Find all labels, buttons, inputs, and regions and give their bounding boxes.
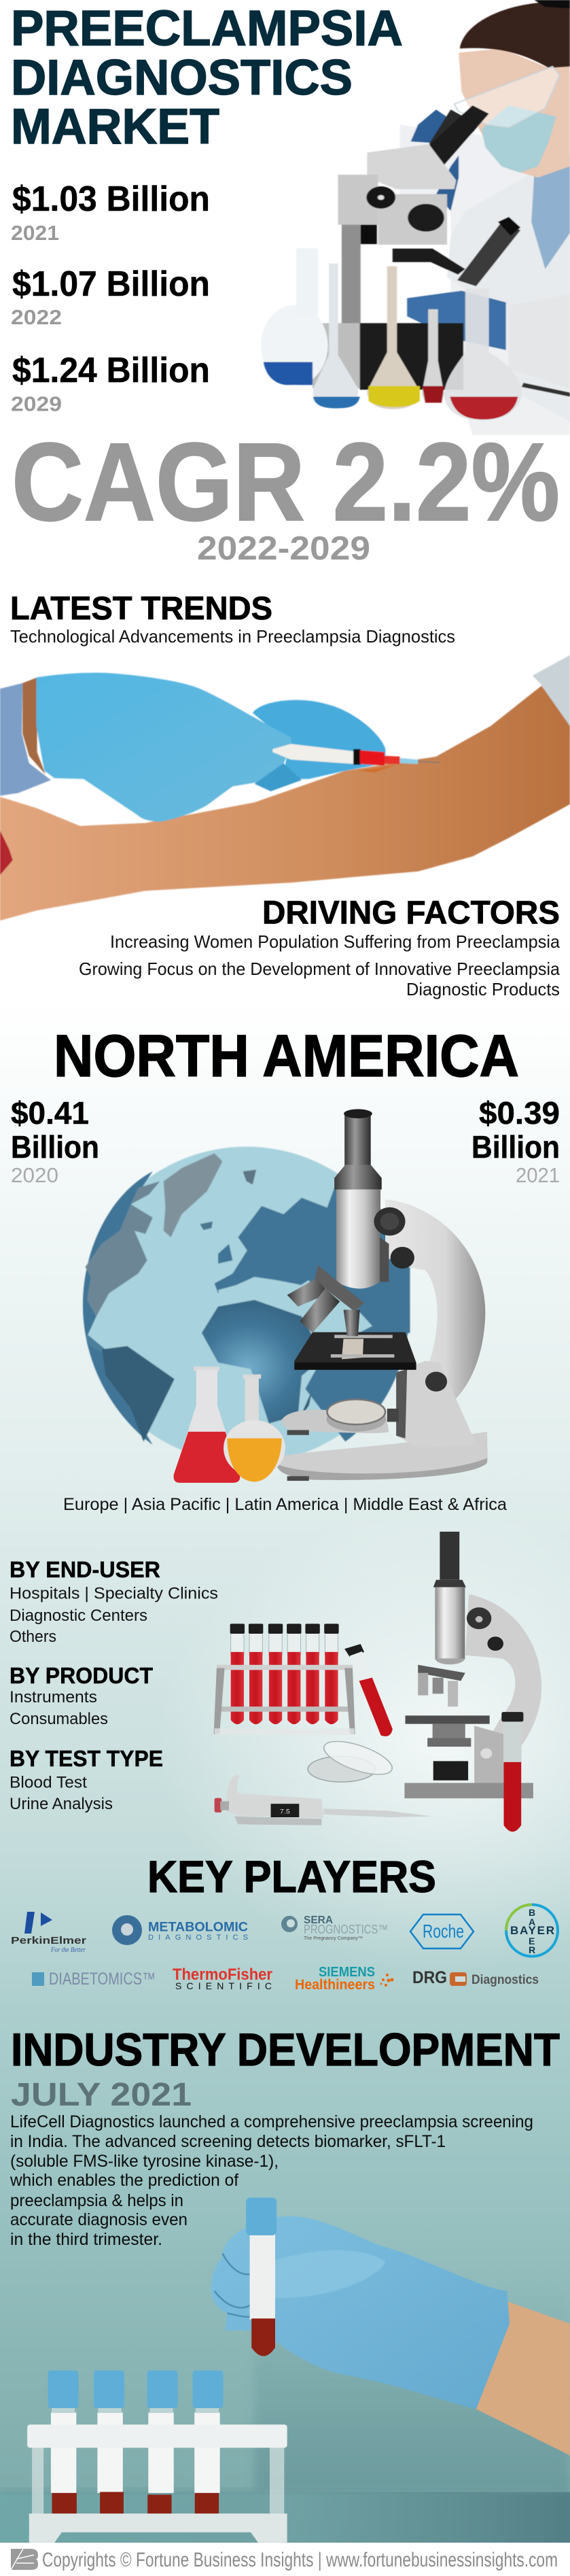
stat: 2029 value: $1.24 Billion [12,351,210,390]
title [11,1,403,154]
logo: Sera Prognostics: SERA [304,1914,333,1926]
driving factors: Growing Focus on the Development of Innovative Preeclampsia [79,959,560,979]
stat: north america 2020: Billion [11,1129,99,1165]
logo: Metabolomic Diagnostics: METABOLOMIC [148,1920,248,1935]
logo: Metabolomic Diagnostics: DIAGNOSTICS [148,1934,248,1942]
segment: by product: Instruments [10,1688,97,1706]
logo: Siemens Healthineers [295,1965,394,1993]
stat: north america 2020: $0.41 [11,1095,89,1131]
icon: test tube rack [214,1624,355,1735]
icon: tube rack [27,2371,287,2543]
logo: Bayer: B [529,1907,535,1918]
development description: preeclampsia & helps in [10,2191,183,2210]
logo: Metabolomic Diagnostics [112,1915,248,1945]
development description: in India. The advanced screening detects biomarker, sFLT-1 [10,2132,446,2151]
background glow behind lab equipment [156,1509,570,1972]
logo: DRG Diagnostics: DRG [412,1968,447,1987]
icon: orange round flask [224,1375,285,1482]
stat: 2021 value [11,179,210,245]
stat: 2022 value: $1.07 Billion [12,264,210,304]
illustration: lab equipment [214,1532,541,1832]
teal gradient background [0,999,570,2543]
segment: by test type: Urine Analysis [10,1795,113,1813]
latest trends [10,591,455,647]
segment: by end-user: BY END-USER [10,1557,160,1582]
icon: microscope [274,1109,488,1481]
stat: 2021 value: 2021 [11,221,59,245]
logo: Sera Prognostics: The Pregnancy Company™ [304,1936,363,1941]
stat: 2022 value: 2022 [11,305,62,329]
title: DIAGNOSTICS [11,50,353,105]
north america heading: NORTH AMERICA [54,1023,519,1089]
icon: pipette: 7.5 [280,1808,290,1815]
logo: Siemens Healthineers: Healthineers [295,1977,375,1993]
logo: Sera Prognostics [281,1914,388,1941]
driving factors: Increasing Women Population Suffering from Preeclampsia [110,931,560,952]
driving factors [79,895,560,999]
segment: by product [10,1663,153,1728]
latest trends: LATEST TRENDS [10,591,272,627]
logo: Bayer: E [529,1936,535,1946]
development description [10,2112,533,2249]
driving factors: DRIVING FACTORS [262,895,560,931]
CAGR period: 2022-2029 [197,530,370,567]
logo: DRG Diagnostics [412,1968,539,1987]
segment: by end-user: Diagnostic Centers [10,1607,147,1625]
logo: PerkinElmer: For the Better [50,1946,86,1954]
development description: in the third trimester. [10,2230,162,2249]
development description: accurate diagnosis even [10,2210,188,2229]
development description: (soluble FMS-like tyrosine kinase-1), [10,2152,279,2171]
logo: Thermo Fisher Scientific [173,1965,272,1991]
logo: Bayer: R [529,1944,535,1955]
icon: tilted test tube [344,1644,393,1736]
stat: 2029 value [11,351,210,416]
segment: by end-user [10,1557,218,1646]
logo: Thermo Fisher Scientific: SCIENTIFIC [175,1980,272,1991]
title: PREECLAMPSIA [11,1,403,56]
stat: 2021 value: $1.03 Billion [12,179,210,219]
footer bar [0,2543,570,2576]
logo: Thermo Fisher Scientific: ThermoFisher [173,1965,272,1984]
title: MARKET [11,99,219,154]
latest trends: Technological Advancements in Preeclampsia Diagnostics [10,626,455,647]
development description: LifeCell Diagnostics launched a comprehensive preeclampsia screening [10,2112,533,2131]
logo: Roche: Roche [423,1921,464,1942]
photo: gloved hand with blood tubes [0,2198,570,2543]
stat: north america 2021 [471,1095,560,1187]
icon: test tube in microscope [501,1712,523,1832]
segment: by end-user: Hospitals | Specialty Clinics [10,1584,218,1603]
stat: north america 2020: 2020 [11,1163,58,1187]
stat: north america 2021: $0.39 [479,1095,560,1131]
logo: Bayer [506,1905,558,1957]
icon: pipette [215,1774,433,1825]
stat: 2029 value: 2029 [11,392,62,416]
segment: by test type: Blood Test [10,1773,87,1792]
icon: microscope [404,1532,541,1798]
logo: Diabetomics: DIABETOMICS™ [49,1970,156,1989]
logo: Sera Prognostics: PROGNOSTICS™ [304,1923,388,1936]
segment: by test type: BY TEST TYPE [10,1746,163,1771]
logo: Siemens Healthineers: SIEMENS [319,1965,375,1980]
stat: north america 2020 [11,1095,99,1187]
driving factors: Diagnostic Products [406,979,560,999]
logo: Roche [410,1914,474,1948]
photo: scientist at microscope [261,0,570,435]
logo: PerkinElmer: PerkinElmer [11,1935,86,1946]
segment: by product: Consumables [10,1710,108,1728]
development date: JULY 2021 [11,2077,192,2113]
segment: by test type [10,1746,163,1813]
logo: DRG Diagnostics: Diagnostics [471,1973,539,1987]
illustration: globe, microscope and flasks [83,1109,488,1483]
key players heading: KEY PLAYERS [147,1851,436,1902]
logo: PerkinElmer [11,1912,86,1954]
stat: north america 2021: 2021 [516,1163,560,1187]
icon: petri dish [308,1734,397,1782]
logo: Bayer: BAYER [510,1924,554,1937]
icon: globe [83,1147,410,1463]
development description: which enables the prediction of [10,2171,238,2190]
stat: north america 2021: Billion [471,1129,560,1165]
stat: 2022 value [11,264,210,329]
icon: red conical flask [174,1367,240,1483]
segment: by product: BY PRODUCT [10,1663,153,1688]
footer logo [11,2549,38,2570]
regions list: Europe | Asia Pacific | Latin America | Middle East & Africa [63,1495,507,1514]
photo: blood draw from arm [0,655,570,921]
logo: Bayer: A [529,1917,535,1927]
segment: by end-user: Others [10,1628,56,1646]
